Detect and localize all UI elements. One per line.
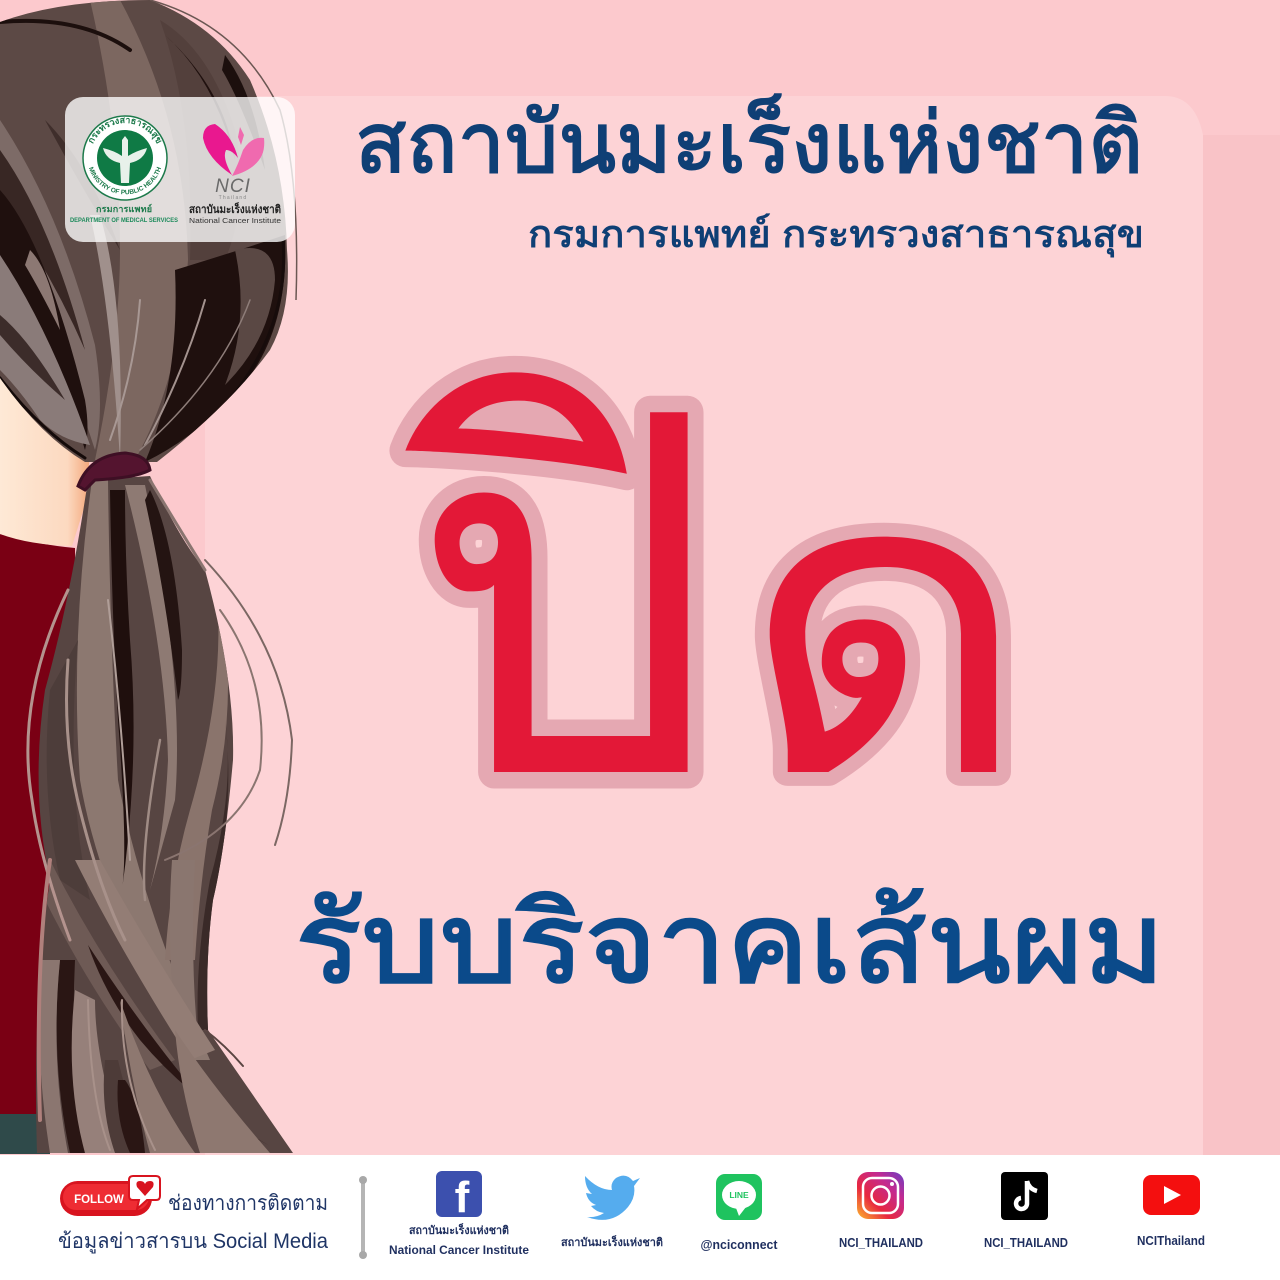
logo: National Cancer Institute: Thailand bbox=[219, 195, 247, 201]
headline: closed: ปิ bbox=[399, 321, 716, 878]
twitter bbox=[561, 1176, 663, 1249]
logo card bbox=[65, 97, 295, 242]
subheading: accepting hair donations: รับบริจาคเส้นผม bbox=[295, 881, 1165, 1006]
line bbox=[700, 1174, 778, 1252]
hair on head bbox=[0, 0, 300, 470]
ponytail bbox=[36, 476, 293, 1153]
youtube: NCIThailand bbox=[1137, 1234, 1205, 1248]
footer band bbox=[0, 1155, 1280, 1280]
stray hair arc on head bbox=[150, 0, 297, 300]
tiktok: NCI_THAILAND bbox=[984, 1236, 1068, 1250]
instagram: NCI_THAILAND bbox=[839, 1236, 923, 1250]
headline: closed: ด bbox=[739, 394, 1031, 862]
jeans bbox=[0, 1114, 50, 1154]
line: @nciconnect bbox=[700, 1237, 778, 1252]
title: สถาบันมะเร็งแห่งชาติ bbox=[355, 94, 1143, 190]
tiktok bbox=[984, 1172, 1068, 1250]
illustration: woman with long ponytail bbox=[0, 0, 300, 1160]
logo: Ministry of Public Health seal: กรมการแพทย์ bbox=[96, 203, 152, 214]
twitter: สถาบันมะเร็งแห่งชาติ bbox=[561, 1235, 663, 1249]
hair wisps bbox=[28, 480, 292, 1120]
logo: National Cancer Institute: สถาบันมะเร็งแห่งชาติ bbox=[189, 202, 281, 216]
logo: National Cancer Institute bbox=[189, 124, 281, 225]
instagram bbox=[839, 1172, 923, 1250]
follow badge: FOLLOW bbox=[74, 1194, 124, 1206]
hair tie bbox=[78, 453, 150, 490]
logo: National Cancer Institute: National Cancer Institute bbox=[189, 218, 281, 225]
facebook: National Cancer Institute bbox=[389, 1243, 529, 1257]
logo: Ministry of Public Health seal: DEPARTMENT OF MEDICAL SERVICES bbox=[70, 218, 178, 224]
subtitle: กรมการแพทย์ กระทรวงสาธารณสุข bbox=[528, 213, 1144, 257]
logo: Ministry of Public Health seal: กระทรวงสาธารณสุข bbox=[89, 117, 162, 144]
youtube bbox=[1137, 1175, 1205, 1248]
logo: National Cancer Institute: NCI bbox=[215, 176, 251, 197]
headline: closed bbox=[399, 321, 1031, 878]
line: LINE bbox=[729, 1190, 749, 1200]
logo: Ministry of Public Health seal: MINISTRY OF PUBLIC HEALTH bbox=[89, 166, 161, 194]
follow badge bbox=[60, 1176, 160, 1216]
follow text line 1: ช่องทางการติดตาม bbox=[168, 1192, 328, 1215]
follow text line 2: ข้อมูลข่าวสารบน Social Media bbox=[58, 1230, 328, 1254]
logo: Ministry of Public Health seal bbox=[70, 115, 178, 224]
facebook bbox=[389, 1171, 529, 1257]
neck and skin bbox=[0, 375, 90, 546]
shirt bbox=[0, 534, 80, 1114]
facebook: f bbox=[455, 1173, 470, 1222]
facebook: สถาบันมะเร็งแห่งชาติ bbox=[409, 1223, 509, 1237]
vertical divider bbox=[359, 1176, 367, 1259]
